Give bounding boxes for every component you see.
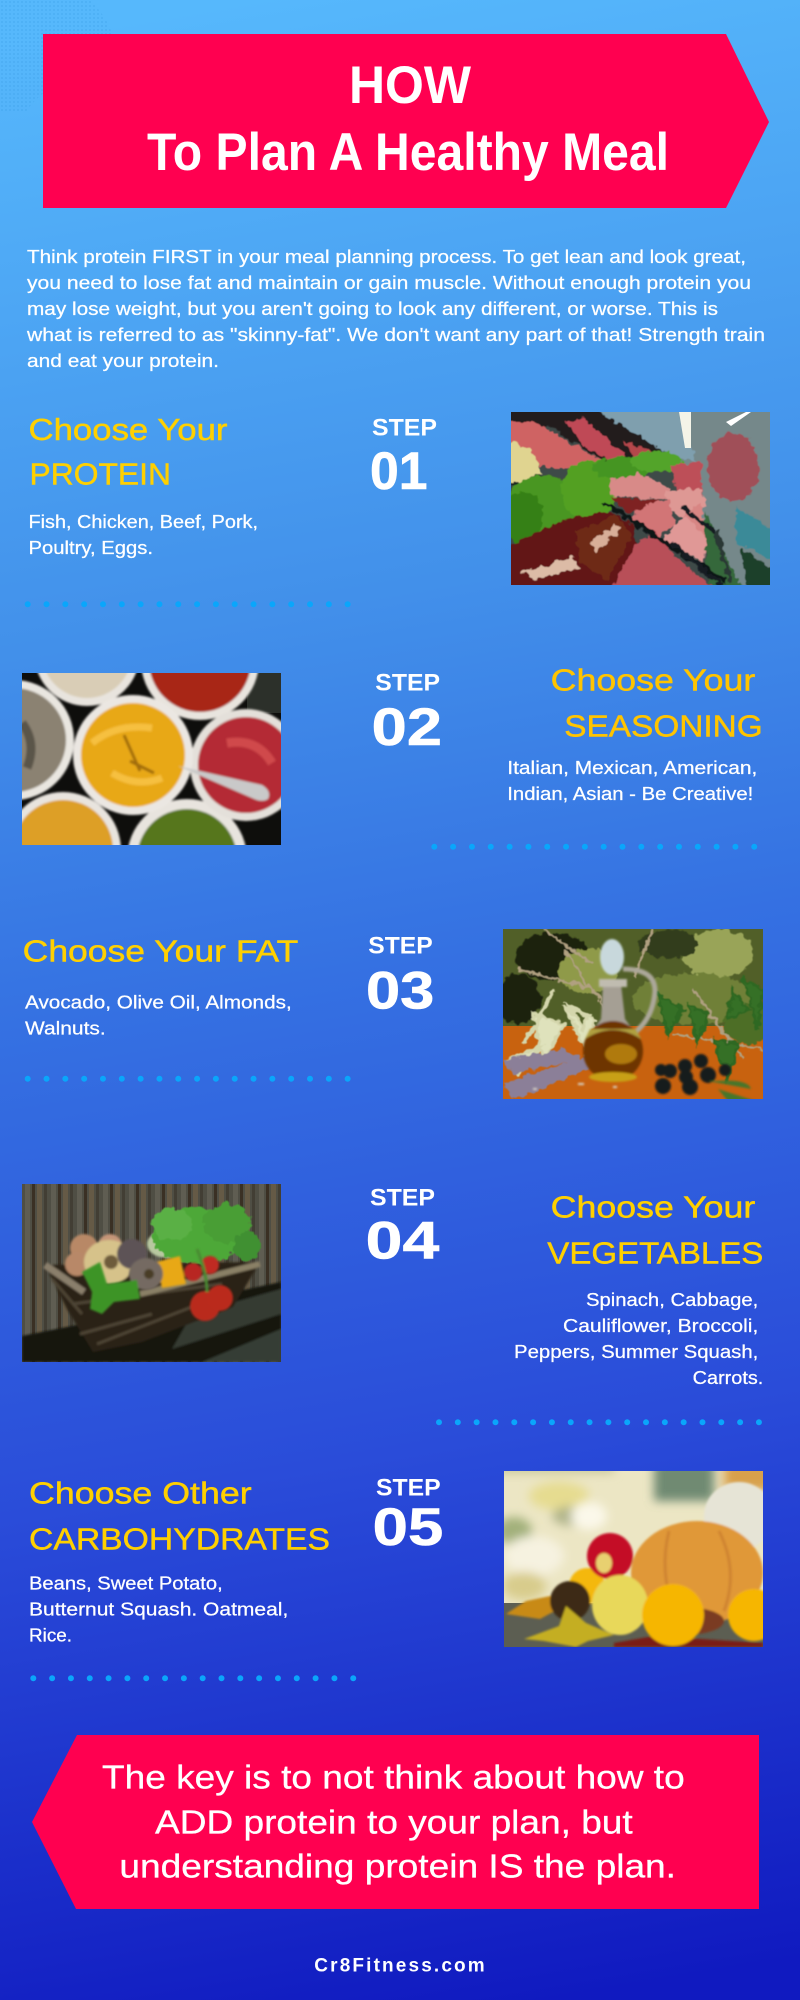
seasoning list <box>507 757 757 804</box>
fat list: Walnuts. <box>25 1018 106 1039</box>
step 01 label: 01 <box>370 442 428 501</box>
step 03 label: STEP <box>368 933 433 960</box>
photo: meat counter <box>511 412 770 585</box>
step 2 panel: seasoning <box>0 600 763 919</box>
intro paragraph <box>26 246 765 371</box>
vegetables list: Carrots. <box>693 1367 763 1388</box>
heading: choose your seasoning: Choose Your <box>551 663 755 698</box>
protein list <box>28 511 258 558</box>
heading: choose your protein <box>28 412 228 492</box>
step 03 label: 03 <box>366 961 434 1020</box>
step 05 label: 05 <box>373 1498 443 1557</box>
heading: choose your protein: PROTEIN <box>30 456 171 492</box>
vegetables list: Spinach, Cabbage, <box>586 1289 758 1310</box>
heading: choose other carbohydrates: Choose Other <box>29 1475 252 1510</box>
heading: choose your vegetables <box>547 1189 763 1270</box>
step 03 label <box>366 933 434 1020</box>
intro paragraph: may lose weight, but you aren't going to look any different, or worse. This is <box>27 298 718 319</box>
step 02 label: STEP <box>375 670 440 697</box>
fat list: Avocado, Olive Oil, Almonds, <box>25 992 292 1013</box>
photo: olive oil bottle <box>503 929 763 1099</box>
intro paragraph: and eat your protein. <box>27 350 219 371</box>
intro paragraph: what is referred to as "skinny-fat". We don't want any part of that! Strength train <box>26 324 765 345</box>
step 04 label: STEP <box>370 1185 435 1212</box>
protein list: Fish, Chicken, Beef, Pork, <box>28 511 258 532</box>
vegetables list: Cauliflower, Broccoli, <box>563 1315 758 1336</box>
step 02 label <box>372 670 442 757</box>
carbohydrates list: Rice. <box>29 1625 72 1646</box>
photo: vegetable basket <box>22 1184 281 1362</box>
heading: choose your seasoning: SEASONING <box>564 709 763 744</box>
photo: spice bowls <box>22 673 281 845</box>
step 05 label: STEP <box>376 1475 441 1502</box>
title banner <box>43 34 769 208</box>
protein list: Poultry, Eggs. <box>28 537 153 558</box>
heading: choose your fat: Choose Your FAT <box>23 934 298 969</box>
callout text: understanding protein IS the plan. <box>119 1848 676 1885</box>
step 04 label: 04 <box>366 1212 440 1271</box>
fat list <box>25 992 292 1039</box>
step 3 panel: fat <box>23 929 773 1104</box>
footer website: Cr8Fitness.com <box>314 1956 485 1977</box>
title text line 1: HOW <box>349 56 471 115</box>
step 02 label: 02 <box>372 698 442 757</box>
carbohydrates list <box>29 1573 288 1646</box>
step 01 label: STEP <box>372 414 437 442</box>
step 5 panel: carbohydrates <box>29 1461 780 1647</box>
title text line 2: To Plan A Healthy Meal <box>147 123 669 182</box>
heading: choose your seasoning <box>551 663 763 744</box>
heading: choose your vegetables: Choose Your <box>551 1189 755 1224</box>
callout text: The key is to not think about how to <box>102 1758 685 1795</box>
heading: choose other carbohydrates: CARBOHYDRATES <box>29 1521 330 1556</box>
closing callout banner <box>32 1735 759 1909</box>
callout text: ADD protein to your plan, but <box>155 1803 633 1840</box>
photo: pumpkins and fruit <box>504 1471 763 1647</box>
vegetables list: Peppers, Summer Squash, <box>514 1341 758 1362</box>
seasoning list: Indian, Asian - Be Creative! <box>507 783 753 804</box>
intro paragraph: Think protein FIRST in your meal planning process. To get lean and look great, <box>27 246 746 267</box>
step 05 label <box>373 1475 443 1557</box>
intro paragraph: you need to lose fat and maintain or gain muscle. Without enough protein you <box>27 272 751 293</box>
heading: choose other carbohydrates <box>29 1475 330 1556</box>
carbohydrates list: Butternut Squash. Oatmeal, <box>29 1599 288 1620</box>
callout text <box>102 1758 685 1885</box>
heading: choose your vegetables: VEGETABLES <box>547 1235 763 1270</box>
seasoning list: Italian, Mexican, American, <box>507 757 757 778</box>
step 04 label <box>366 1185 440 1271</box>
step 01 label <box>370 414 437 501</box>
step 1 panel: protein <box>28 407 776 592</box>
heading: choose your protein: Choose Your <box>28 412 228 447</box>
step 4 panel: vegetables <box>22 1184 763 1388</box>
carbohydrates list: Beans, Sweet Potato, <box>29 1573 223 1594</box>
vegetables list <box>514 1289 763 1388</box>
